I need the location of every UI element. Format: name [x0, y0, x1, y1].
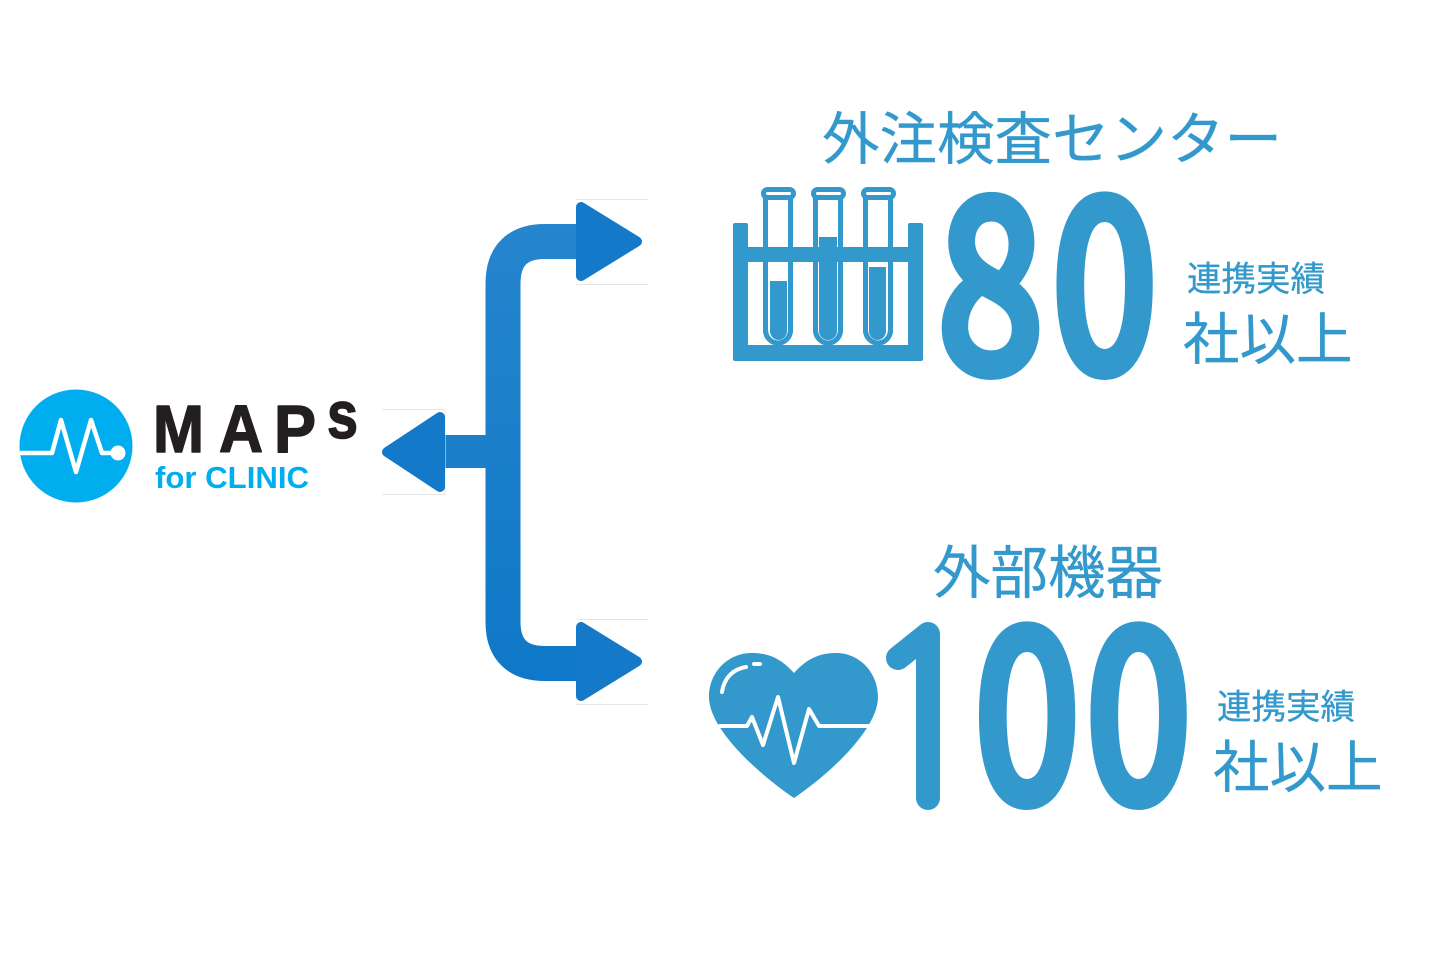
- bracket stem: [503, 242, 578, 664]
- logo wordmark: MAPS: s: [327, 378, 358, 453]
- rack frame: [733, 223, 923, 361]
- arrow: left to logo: [382, 409, 445, 495]
- tube 2: [814, 190, 844, 343]
- logo icon: pulse circle: [20, 390, 132, 502]
- number: 100: 0: [1087, 534, 1190, 867]
- tube 1: [764, 190, 794, 343]
- label: partner count bottom: 連携実績: [1217, 689, 1355, 727]
- logo wordmark: MAPS: M: [153, 392, 204, 467]
- icon: heart with pulse: [709, 653, 878, 798]
- stub to logo: [443, 435, 487, 468]
- arrow: down-right: [576, 620, 648, 704]
- heading: external labs: 外注検査センター: [822, 108, 1282, 172]
- connector: bracket arrows: [382, 200, 648, 704]
- label: partner count bottom: 社以上: [1213, 736, 1382, 799]
- logo wordmark: MAPS: P: [274, 392, 316, 467]
- label: partner count top: 連携実績: [1187, 261, 1325, 299]
- pulse line: [720, 697, 868, 763]
- number: 80: 8: [939, 104, 1042, 437]
- heart shape: [709, 653, 878, 798]
- number: 100: 1: [876, 533, 974, 866]
- label: partner count bottom: [1213, 689, 1382, 799]
- number: 80: 0: [1053, 104, 1156, 437]
- icon: test tube rack: [733, 190, 923, 361]
- heading: external devices: 外部機器: [933, 542, 1163, 606]
- number: 100: 0: [975, 534, 1079, 867]
- logo wordmark: MAPS: [153, 378, 358, 467]
- number: 100: [886, 621, 1187, 810]
- number: 80: [939, 104, 1156, 437]
- highlight: [722, 664, 760, 692]
- logo subtitle: for CLINIC: for CLINIC: [155, 460, 309, 495]
- tube 3: [864, 190, 894, 343]
- logo wordmark: MAPS: A: [219, 392, 263, 467]
- arrow: up-right: [576, 200, 648, 284]
- logo: MAPS for CLINIC: [20, 378, 358, 502]
- label: partner count top: [1183, 261, 1352, 371]
- tube bottoms over frame opening: [766, 262, 890, 343]
- label: partner count top: 社以上: [1183, 308, 1352, 371]
